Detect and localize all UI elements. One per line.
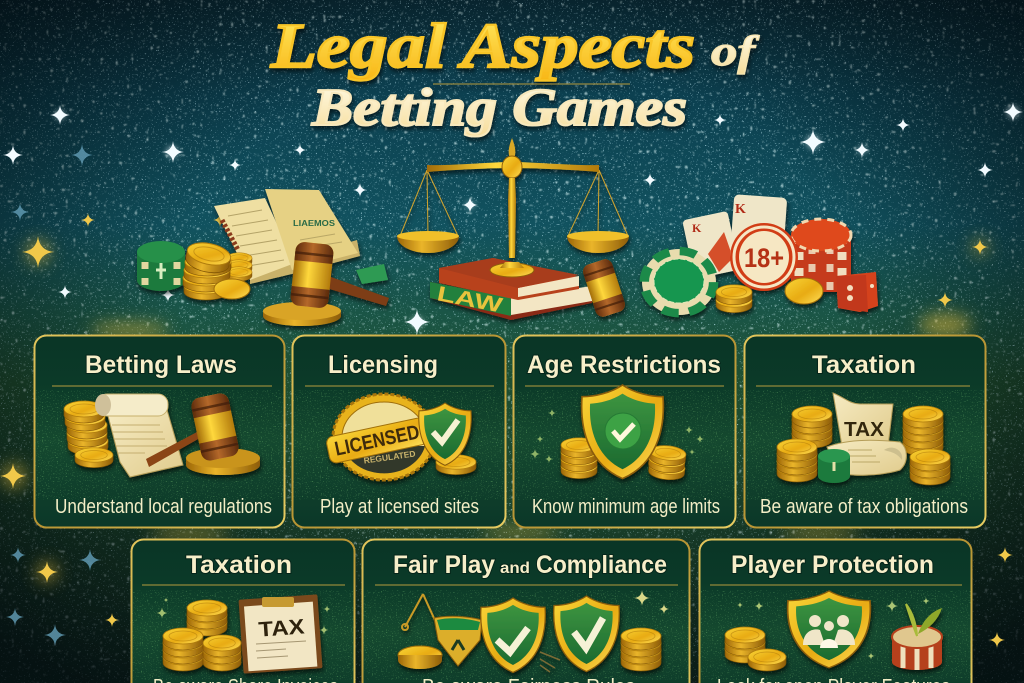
heading: Betting Laws xyxy=(85,351,237,379)
icon: gold coin stacks xyxy=(183,239,252,300)
icon: red die xyxy=(836,272,878,312)
icon: sparkles xyxy=(737,598,930,660)
icon: green law book xyxy=(430,282,592,320)
icon: gold coins xyxy=(716,278,823,313)
panel frame xyxy=(700,540,972,683)
illustration: cards, chips, dice and 18+ badge xyxy=(642,194,878,315)
icon: balance scale xyxy=(397,138,629,277)
icon: tax scroll, coins and chip: TAX xyxy=(844,419,885,441)
icon: licensed seal and shield: LICENSED xyxy=(333,421,422,461)
badge: 18+ xyxy=(730,223,798,291)
title xyxy=(270,11,760,137)
caption: Play at licensed sites xyxy=(320,496,479,518)
badge: 18+: 18+ xyxy=(744,243,784,273)
panel: player protection xyxy=(700,540,972,683)
heading: Taxation xyxy=(812,351,916,379)
heading xyxy=(393,551,667,579)
panel: taxation xyxy=(744,336,986,528)
panel: age restrictions xyxy=(514,336,736,528)
panel: betting laws xyxy=(34,336,284,528)
icon: shields, chip and coins xyxy=(398,594,661,672)
icon: coins, scroll and gavel xyxy=(64,392,260,477)
icon: red book xyxy=(439,258,579,300)
caption: Know minimum age limits xyxy=(532,496,720,518)
icon: sparkles xyxy=(634,590,669,614)
icon: green chip stack xyxy=(137,241,185,291)
icon: green law book: LAW xyxy=(435,282,504,318)
icon: open law book xyxy=(214,189,360,284)
illustration: law books, coins and gavel xyxy=(137,189,389,326)
icon: playing cards xyxy=(682,194,787,279)
icon: gavel with sound block xyxy=(263,241,389,326)
title: of xyxy=(711,29,760,75)
caption: Be aware of tax obligations xyxy=(760,496,968,518)
heading: Player Protection xyxy=(731,551,934,579)
icon: shield with check and coins xyxy=(561,385,687,481)
heading: Age Restrictions xyxy=(527,351,721,379)
icon: green chip block xyxy=(356,264,388,284)
title: Legal Aspects xyxy=(270,11,695,81)
icon: playing cards: K xyxy=(692,221,702,235)
panel frame xyxy=(292,336,506,528)
panel: licensing xyxy=(292,336,506,528)
caption: Understand local regulations xyxy=(55,496,272,518)
icon: green poker chip xyxy=(642,249,716,315)
heading: Compliance xyxy=(536,551,667,579)
panel frame xyxy=(34,336,284,528)
panel frame xyxy=(744,336,986,528)
icon: coins and tax clipboard: TAX xyxy=(258,615,305,642)
panel frame xyxy=(132,540,354,683)
icon: sparkles xyxy=(156,598,330,634)
heading: and xyxy=(500,560,530,577)
icon: gavel head xyxy=(581,257,627,319)
heading: Licensing xyxy=(328,351,438,379)
icon: playing cards: K xyxy=(735,202,746,217)
panel frame xyxy=(514,336,736,528)
icon: licensed seal and shield xyxy=(325,394,476,480)
panel: fair play and compliance xyxy=(362,540,690,683)
icon: sparkles xyxy=(530,409,704,463)
heading: Taxation xyxy=(186,551,292,579)
illustration: scales of justice on law books xyxy=(397,138,629,320)
icon: licensed seal and shield: REGULATED xyxy=(363,448,416,466)
title: Betting Games xyxy=(311,79,687,137)
icon: shield with people, coins and plant chip xyxy=(725,591,942,671)
panel frame xyxy=(362,540,690,683)
icon: red chip stack xyxy=(791,219,851,292)
heading: Fair Play xyxy=(393,551,495,579)
icon: open law book: LIAEMOS xyxy=(293,219,336,228)
icon: tax scroll, coins and chip xyxy=(777,393,950,485)
icon: coins and tax clipboard xyxy=(163,594,322,674)
panel: taxation second xyxy=(132,540,354,683)
